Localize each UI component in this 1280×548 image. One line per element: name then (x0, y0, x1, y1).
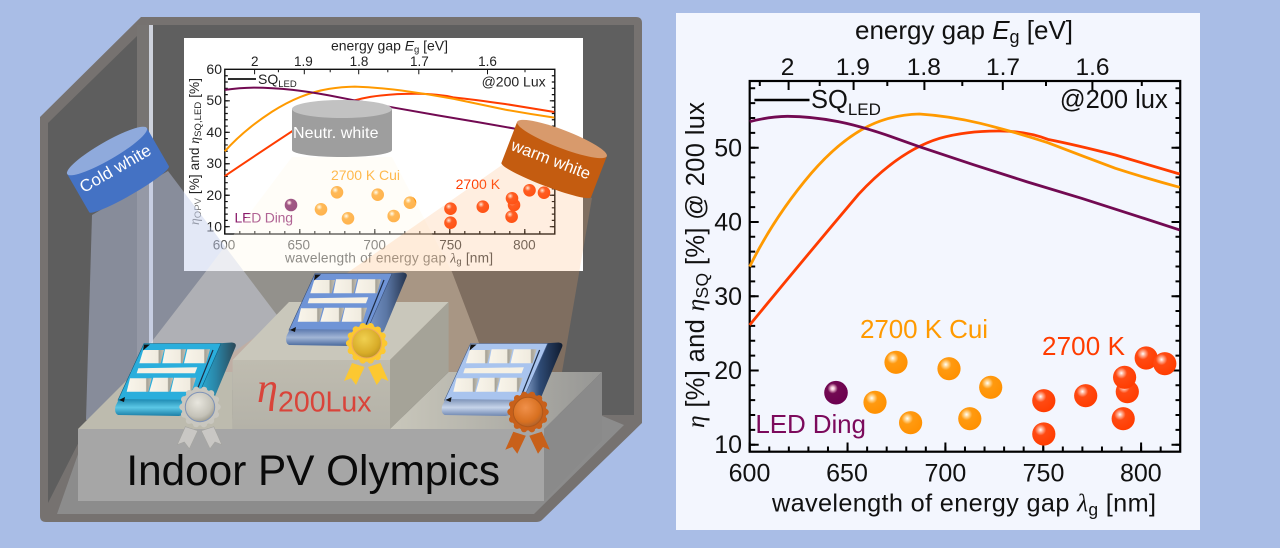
plot frame and ticks (749, 81, 1180, 452)
inset y axis title: [%] and (187, 144, 202, 198)
legend SQ LED: LED (848, 100, 881, 119)
x axis labels: 800 (1120, 460, 1162, 488)
lamp: cold white (63, 120, 172, 217)
data points: 2700 K (1032, 346, 1176, 446)
top axis title: [eV] (1020, 15, 1073, 45)
inset top axis title: g (414, 45, 419, 56)
room frame (40, 17, 642, 522)
center block top (233, 302, 449, 360)
inset chart (184, 38, 583, 271)
inset legend SQ LED: SQ (258, 71, 278, 87)
top axis labels: 1.8 (907, 54, 941, 81)
inset top axis labels (251, 54, 497, 69)
inset x axis labels: 800 (513, 237, 536, 252)
x axis labels: 700 (925, 460, 966, 488)
eta 200 lux label (257, 366, 372, 419)
x axis labels: 650 (826, 460, 868, 488)
curve: LED (750, 116, 1180, 230)
series label: 2700 K Cui: 2700 K Cui (860, 314, 988, 344)
top axis labels: 1.7 (986, 54, 1020, 81)
inset y axis title: η (187, 137, 202, 144)
center block right side (390, 302, 449, 429)
inset x axis labels: 700 (363, 237, 386, 252)
right step top (390, 372, 602, 429)
inset top axis labels: 1.8 (350, 54, 368, 69)
top axis title: g (1010, 27, 1020, 47)
x axis title: g (1088, 500, 1098, 520)
inset y axis title: OPV (193, 197, 204, 218)
inset top axis labels: 2 (251, 54, 259, 69)
medal: bronze (505, 394, 550, 454)
solar panel: bronze (442, 342, 562, 416)
left wall (48, 36, 137, 503)
inset y axis labels (206, 61, 222, 234)
floor (57, 415, 624, 514)
inset top axis title: energy gap E (331, 38, 414, 54)
inset x axis title: wavelength of energy gap λ (285, 251, 456, 266)
lamp: neutral white: Neutr. white (293, 125, 379, 142)
inset y axis labels: 30 (206, 155, 222, 171)
y axis title: SQ (692, 273, 712, 298)
inset series labels: LED Ding (234, 210, 293, 226)
chart background (676, 13, 1200, 530)
series label: LED Ding: LED Ding (755, 409, 866, 439)
y axis labels: 40 (714, 208, 742, 236)
inset y axis title: η (187, 218, 202, 225)
x axis labels (729, 460, 1162, 488)
medal: gold (344, 325, 388, 385)
x axis labels: 750 (1023, 460, 1064, 488)
data points: LED Ding (824, 381, 848, 405)
top axis labels (781, 54, 1110, 81)
door frame stripe (137, 25, 153, 420)
inset legend SQ LED (228, 71, 297, 90)
inset legend SQ LED: LED (278, 79, 297, 90)
inset top axis labels: 1.9 (294, 54, 313, 69)
top axis labels: 1.6 (1075, 54, 1110, 81)
eta 200 lux label: 200Lux (278, 387, 372, 419)
y axis labels: 50 (714, 134, 742, 162)
panel: main chart (676, 13, 1200, 530)
legend SQ LED (754, 86, 881, 119)
inset y axis title: [%] (187, 78, 202, 102)
inset x axis title: g (456, 257, 462, 268)
solar panel: gold (286, 272, 407, 346)
inset top axis title: [eV] (419, 38, 448, 54)
podium title: Indoor PV Olympics (126, 447, 500, 494)
y axis labels: 30 (714, 283, 742, 311)
panel: room scene (40, 17, 642, 522)
inset y axis labels: 60 (206, 61, 222, 77)
curve: 2700 K Cui (750, 114, 1180, 267)
top axis labels: 1.9 (836, 54, 870, 81)
curves (750, 114, 1180, 325)
inset top axis labels: 1.6 (478, 54, 497, 69)
series label: 2700 K: 2700 K (1042, 331, 1126, 361)
inset series labels: 2700 K Cui (331, 167, 400, 183)
lamp: neutral white (292, 100, 392, 157)
center block front (233, 360, 390, 429)
light cones (86, 157, 592, 420)
inset y axis labels: 50 (206, 92, 222, 108)
podium (78, 302, 602, 501)
base front (78, 429, 544, 501)
solar panel: silver (115, 342, 236, 416)
eta 200 lux label: η (257, 366, 278, 412)
inset top axis labels: 1.7 (410, 54, 429, 69)
inset lux note: @200 Lux (482, 74, 546, 90)
inset x axis title: [nm] (462, 251, 493, 266)
inset x axis labels (213, 237, 536, 252)
inset curves (225, 87, 554, 176)
x axis title: wavelength of energy gap λ (772, 490, 1088, 518)
lamp: warm white (499, 113, 610, 203)
inset series labels: 2700 K (456, 176, 501, 192)
inset y axis labels: 10 (206, 218, 222, 234)
curve: 2700 K (750, 131, 1180, 325)
y axis labels (714, 134, 742, 459)
inset series labels (234, 167, 501, 226)
x axis labels: 600 (729, 460, 770, 488)
x axis title: [nm] (1098, 490, 1156, 518)
inset y axis title: SQ,LED (193, 102, 204, 137)
inset data points (285, 184, 550, 229)
back wall (149, 25, 634, 415)
inset y axis labels: 40 (206, 124, 222, 140)
legend SQ LED: SQ (811, 86, 848, 114)
lamp: cold white: Cold white (76, 141, 154, 197)
y axis title: [%] @ 200 lux (682, 102, 710, 272)
lux note: @200 lux (1060, 86, 1168, 114)
top axis labels: 2 (781, 54, 794, 81)
inset x axis labels: 650 (288, 237, 310, 252)
y axis labels: 20 (714, 357, 742, 385)
left step top (78, 372, 233, 429)
top axis title: energy gap E (855, 15, 1010, 45)
inset chart background (184, 38, 583, 271)
inset y axis labels: 20 (206, 187, 222, 203)
base right side (544, 372, 602, 501)
data points: 2700 K Cui (863, 351, 1002, 434)
y axis title: η [%] and η (681, 299, 710, 428)
medal: silver (177, 388, 222, 449)
inset plot frame and ticks (224, 69, 555, 234)
inset x axis labels: 750 (439, 237, 462, 252)
lamp: warm white: warm white (508, 136, 593, 183)
y axis labels: 10 (714, 431, 742, 459)
inset x axis labels: 600 (213, 237, 235, 252)
